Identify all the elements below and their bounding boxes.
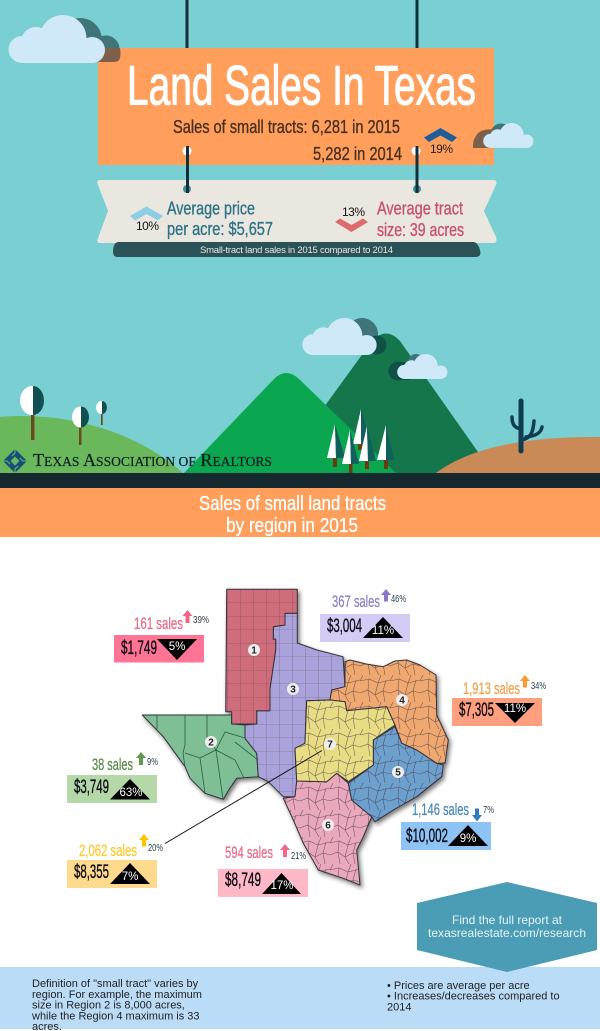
- callout: region 3: 11%: [372, 625, 394, 637]
- callout: region 7: 2,062 sales: [79, 841, 137, 860]
- text: 13 percent: 13%: [342, 205, 365, 219]
- callout: region 7: $8,355: [74, 862, 109, 883]
- callout: region 3: 46%: [391, 594, 406, 605]
- text: average price: [167, 198, 273, 239]
- text: small tract definition: [31, 978, 202, 1031]
- region number markers: 4: [399, 696, 405, 706]
- callout: region 3: $3,004: [327, 616, 362, 637]
- callout: region 5: 1,146 sales: [412, 800, 469, 819]
- callout: region 1: [114, 610, 209, 662]
- cloud: right of banner: [473, 123, 533, 148]
- callout: region 4: $7,305: [459, 700, 494, 721]
- cloud: top-left shadow: [58, 18, 120, 62]
- region 6: [283, 773, 372, 885]
- region 3: [245, 613, 345, 797]
- callout: region 5: [401, 800, 494, 850]
- panel: section heading: Sales of small land tracts: [199, 492, 386, 515]
- hanging strings: lower with pegs: [182, 146, 421, 193]
- region number markers: [205, 644, 408, 832]
- hill: left green: [0, 416, 183, 473]
- icon: cactus: [512, 401, 542, 451]
- text: notes: • Prices are average per acre: [387, 980, 530, 992]
- text: small tract definition: region. For example, the maximum: [32, 989, 202, 1001]
- ribbon subtitle bar: [113, 242, 480, 257]
- text: notes: • Increases/decreases compared to: [387, 990, 560, 1002]
- icon: round tree large: [20, 386, 44, 440]
- text: notes: [387, 980, 560, 1014]
- callout: region 7: 7%: [122, 871, 138, 883]
- icon: round tree small: [96, 401, 107, 425]
- callout: region 6: 17%: [270, 880, 294, 892]
- callout: region 5: 9%: [460, 833, 476, 845]
- callout: full report hexagon: [417, 882, 597, 972]
- callout: region 4: 34%: [531, 681, 546, 692]
- ground band: [0, 473, 600, 488]
- callout: region 1: 5%: [169, 641, 185, 653]
- text: average tract: size: 39 acres: [377, 219, 464, 240]
- callout: region 7: 20%: [148, 843, 163, 854]
- callout: region 4: 11%: [504, 703, 526, 715]
- region 1: [226, 589, 297, 724]
- mountain: bright green: [184, 373, 396, 473]
- text: average price: per acre: $5,657: [167, 218, 273, 239]
- text: average tract: [377, 198, 464, 240]
- panel: section heading: by region in 2015: [226, 514, 358, 537]
- icon: diamond logo: [3, 449, 27, 473]
- callout: region 2: 9%: [147, 757, 158, 768]
- region number markers: 2: [208, 738, 214, 748]
- icon: chevron up 10 percent: [130, 206, 163, 220]
- text: 19 percent: 19%: [430, 142, 453, 156]
- region number markers: 5: [395, 768, 401, 778]
- map: Texas regions: [142, 589, 448, 885]
- text: 10 percent: 10%: [136, 219, 159, 233]
- callout: region 6: [218, 843, 308, 897]
- region 4: [330, 660, 448, 763]
- panel: metrics ribbon: [97, 180, 497, 257]
- text: average price: Average price: [167, 198, 255, 218]
- panel: section heading: [0, 488, 600, 537]
- logo: Texas Association of Realtors: TEXAS ASSOCIATION OF REALTORS: [33, 450, 272, 470]
- mountain: dark green: [300, 334, 480, 473]
- callout: region 6: 21%: [291, 851, 306, 862]
- icon: round tree medium: [72, 406, 89, 445]
- callout: region 1: 39%: [193, 615, 209, 626]
- callout: region 7: [67, 834, 163, 888]
- ribbon subtitle bar: Small-tract land sales in 2015 compared to 2014: [200, 245, 393, 256]
- region 5: [348, 727, 443, 822]
- icon: chevron up 19 percent: [424, 128, 457, 142]
- text: small tract definition: while the Region 4 maximum is 33: [31, 1010, 200, 1022]
- panel: title banner: [98, 48, 494, 165]
- callout: region 2: 38 sales: [92, 755, 133, 774]
- text: sales 2015: Sales of small tracts: 6,281 in 2015: [173, 116, 400, 137]
- callout: region 5: 7%: [483, 805, 494, 816]
- region 7: [295, 700, 395, 782]
- cloud: top-left: [8, 15, 120, 63]
- hanging strings: top: [186, 0, 418, 48]
- callout: region 3: 367 sales: [332, 592, 380, 611]
- cloud: over mountains large: [302, 318, 386, 355]
- callout: region 2: $3,749: [74, 777, 109, 798]
- callout: region 3: [320, 589, 410, 642]
- region 2: [142, 715, 258, 799]
- cloud: over mountains small: [388, 354, 447, 380]
- hill: desert: [436, 437, 600, 473]
- leader line: region 7: [165, 750, 322, 844]
- region number markers: 6: [325, 820, 331, 832]
- text: notes: 2014: [387, 1002, 411, 1014]
- scene: sky and landscape: [0, 0, 600, 474]
- text: small tract definition: size in Region 2 is 8,000 acres,: [32, 1000, 185, 1012]
- county lines: [157, 589, 448, 885]
- region number markers: 3: [290, 684, 296, 696]
- callout: region 5: $10,002: [406, 826, 448, 847]
- text: small tract definition: Definition of "small tract" varies by: [32, 978, 199, 990]
- region number markers: 1: [251, 646, 257, 656]
- icon: pine tree group: [327, 409, 394, 473]
- callout: region 4: [452, 675, 546, 726]
- callout: region 1: 161 sales: [134, 614, 183, 633]
- callout: region 2: 63%: [119, 787, 143, 799]
- panel: footer notes: [0, 967, 600, 1031]
- callout: region 4: 1,913 sales: [463, 679, 520, 698]
- callout: full report hexagon: Find the full report at: [452, 913, 563, 927]
- callout: region 1: $1,749: [121, 638, 157, 659]
- text: sales 2014: 5,282 in 2014: [313, 143, 402, 164]
- region number markers: 7: [327, 740, 333, 750]
- callout: region 6: 594 sales: [225, 843, 273, 862]
- callout: full report hexagon: texasrealestate.com/research: [428, 926, 586, 940]
- text: average tract: Average tract: [377, 198, 463, 218]
- icon: chevron down 13 percent: [335, 218, 368, 232]
- callout: region 2: [67, 752, 158, 803]
- callout: region 6: $8,749: [225, 870, 261, 891]
